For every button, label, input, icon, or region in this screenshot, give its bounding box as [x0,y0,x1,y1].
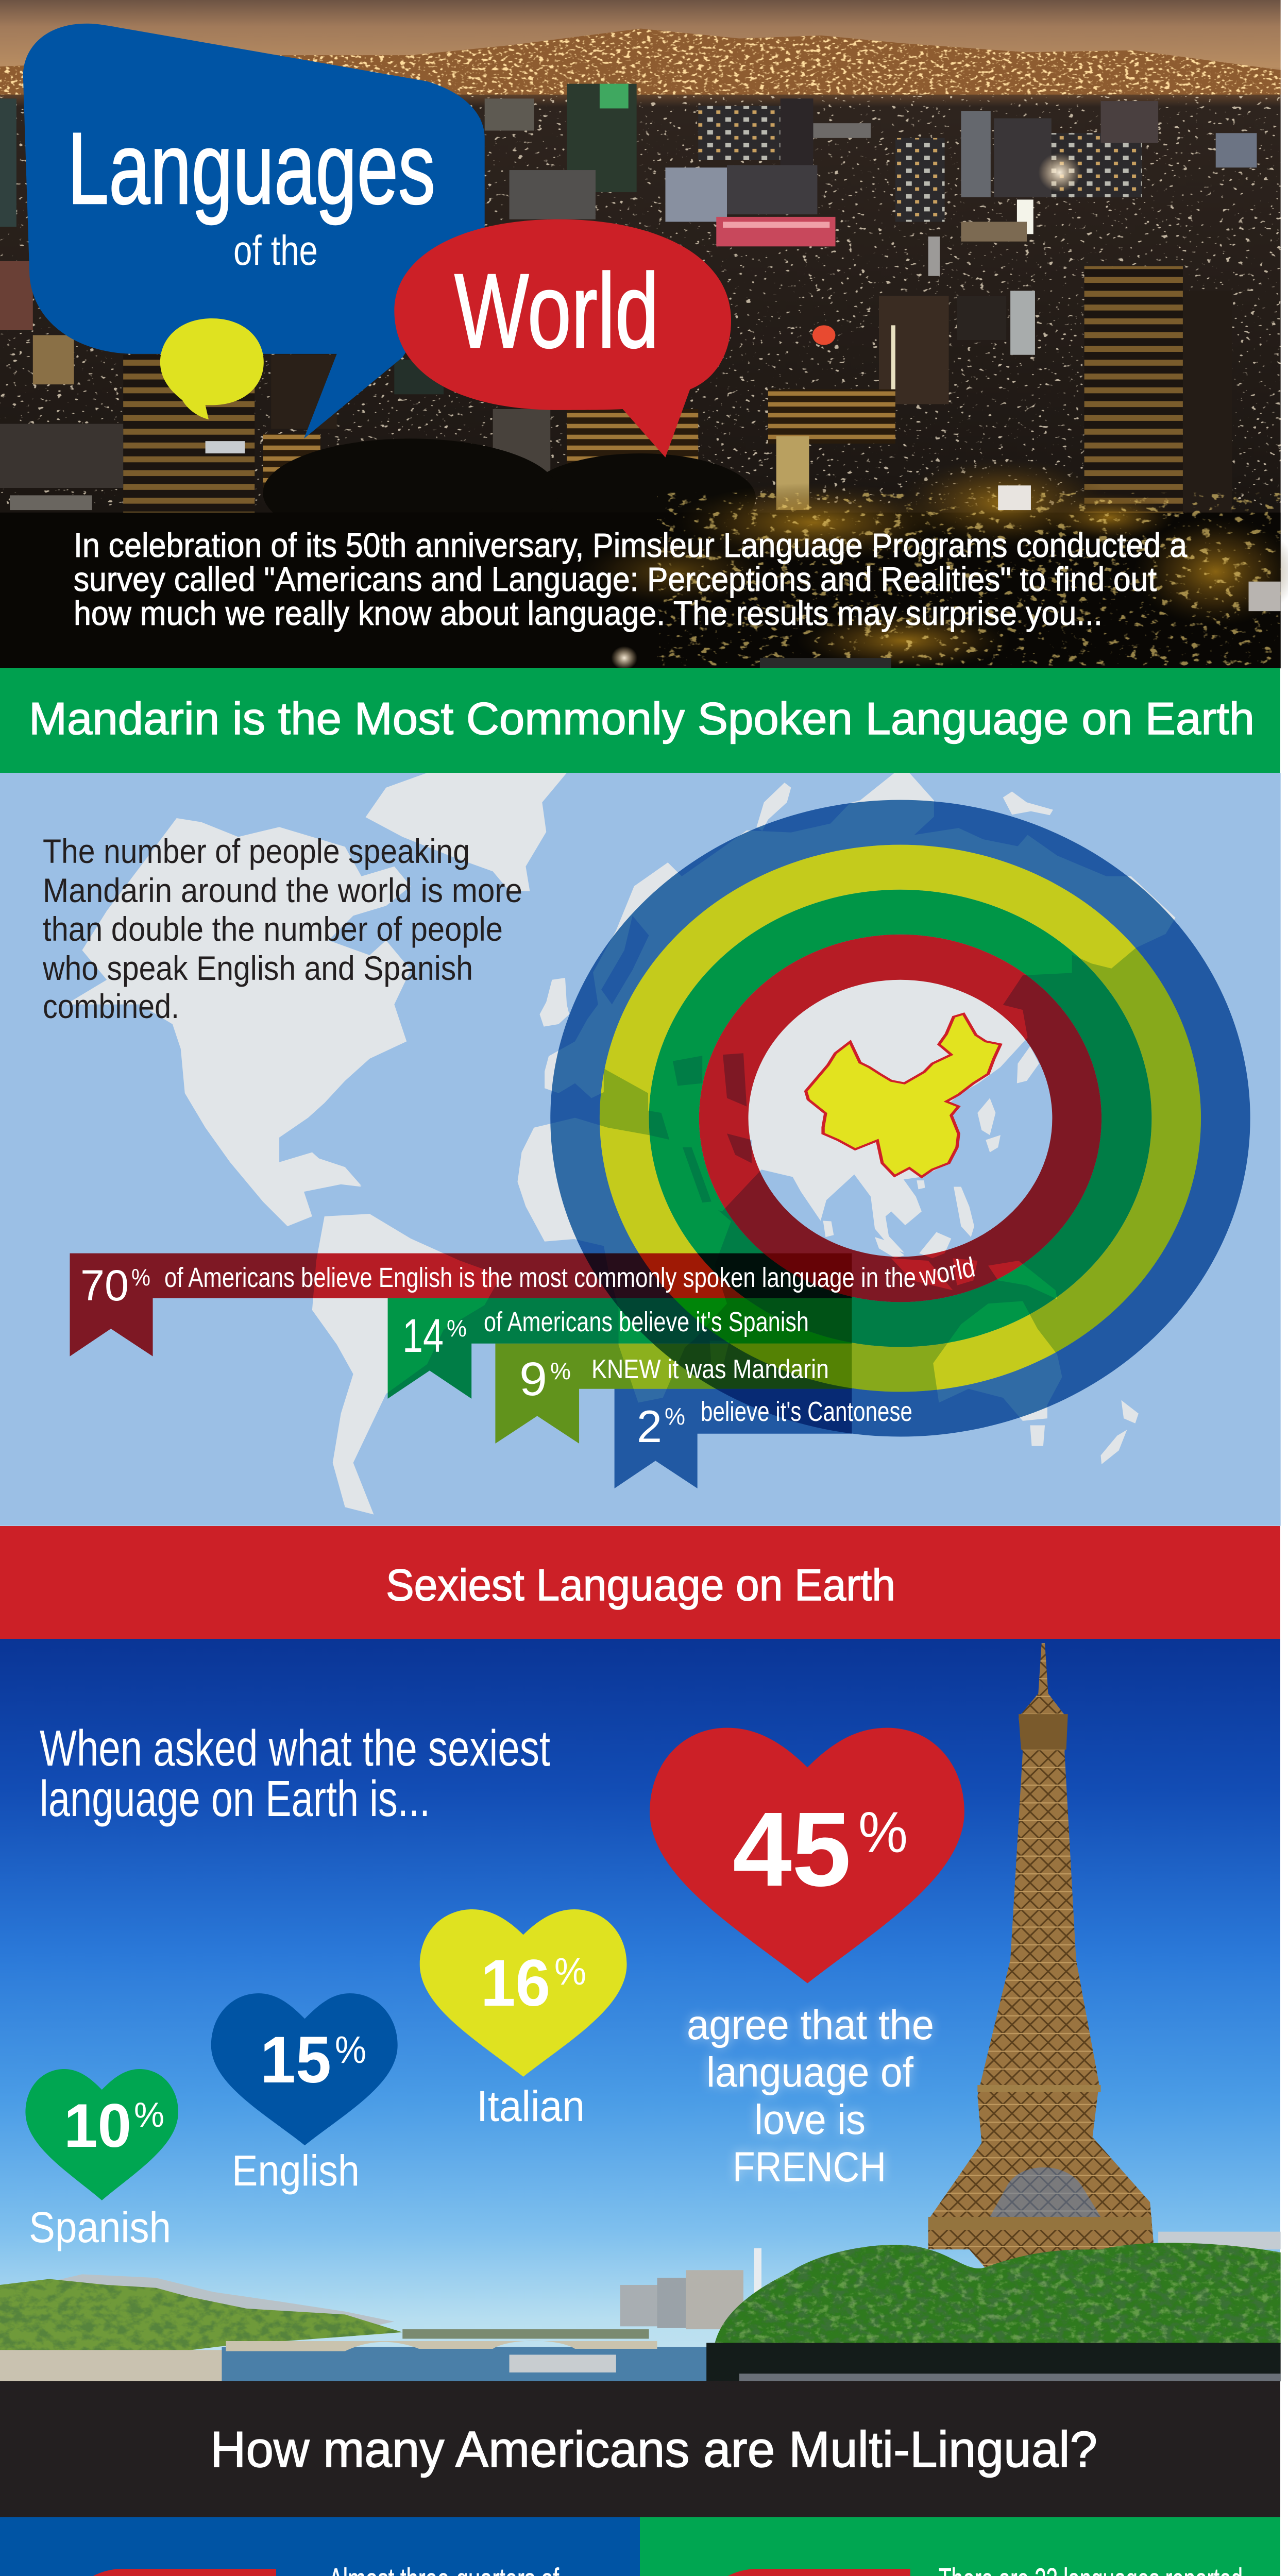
heart: English 15 percent [211,1993,398,2195]
ribbon label: 9 percent: KNEW it was Mandarin [591,1354,829,1384]
intro text [74,526,1187,632]
map body text: combined. [43,987,179,1025]
heart: French 45 percent: % [858,1800,908,1865]
map body text: The number of people speaking [43,832,470,870]
inland seas [601,916,752,1202]
intro text: how much we really know about language. The results may surprise you... [74,594,1103,632]
section: Paris photo [0,1639,1281,2381]
heart: Spanish 10 percent: 10 [64,2091,131,2160]
ribbon: 9 percent [495,1344,852,1444]
heart: English 15 percent: 15 [260,2023,331,2097]
ribbon label: 70 percent: 70 [80,1261,129,1310]
ribbon label: 70 percent [80,1251,977,1310]
ribbon label: 9 percent [519,1353,829,1405]
section banner: Mandarin: Mandarin is the Most Commonly Spoken Language on Earth [29,693,1255,744]
panel: world map with language rings [0,773,1281,1526]
title: Languages [67,111,435,225]
intro text: In celebration of its 50th anniversary, Pimsleur Language Programs conducted a [74,526,1187,564]
ring: yellow [600,845,1201,1392]
text: French callout: agree that the [687,2002,934,2048]
ribbon label: 70 percent: of Americans believe English is the most commonly spoken language in the [164,1262,916,1293]
speech bubble: yellow [160,318,264,419]
heart: Italian 16 percent: % [554,1950,586,1993]
heart: Italian 16 percent: 16 [481,1946,550,2020]
section banner: Multi-Lingual [0,2381,1280,2517]
section banner: Multi-Lingual: How many Americans are Multi-Lingual? [210,2421,1097,2478]
text: sexiest question: language on Earth is... [40,1770,430,1827]
ribbon: 70 percent [70,1253,852,1357]
section banner: Sexiest Language [0,1526,1280,1639]
text: sexiest question: When asked what the sexiest [40,1720,550,1776]
ribbon label: 9 percent: % [550,1358,571,1384]
ribbon label: 14 percent: 14 [402,1310,444,1362]
title [67,111,659,370]
map body text [42,832,522,1025]
map body text: than double the number of people [43,910,503,948]
ring: green [649,890,1151,1347]
heart: Spanish 10 percent [25,2069,178,2251]
heart: Italian 16 percent: Italian [477,2082,585,2130]
speech bubble: red [394,219,731,457]
ribbon label: 2 percent [637,1396,912,1452]
heart: Spanish 10 percent: % [134,2095,164,2134]
callout: 27 percent say yes [687,2569,910,2576]
heart: English 15 percent: % [335,2028,366,2071]
ribbon label: 9 percent: 9 [519,1353,547,1405]
map of China [806,1014,1001,1177]
text: French callout: love is [754,2096,866,2143]
intro text: survey called "Americans and Language: Perceptions and Realities" to find out [74,560,1157,598]
heart: Spanish 10 percent: Spanish [29,2203,171,2251]
callout: 73 percent say no [53,2569,276,2576]
text: French callout [687,2002,934,2191]
ribbon label: 14 percent [402,1307,809,1362]
map body text: who speak English and Spanish [42,949,473,987]
heart: English 15 percent: English [232,2146,360,2195]
text: French callout: language of [706,2049,913,2096]
heart: French 45 percent: 45 [733,1790,851,1908]
ring: red [699,935,1101,1302]
ribbon: 14 percent [388,1298,852,1399]
title: World [454,252,659,370]
heart: Italian 16 percent [420,1909,627,2130]
panel: say yes [640,2517,1280,2576]
section banner: Mandarin [0,668,1280,773]
ribbon label: 70 percent: world [917,1251,977,1293]
title: of the [233,227,318,274]
heart: French 45 percent [650,1728,964,1984]
section banner: Sexiest Language: Sexiest Language on Earth [386,1561,895,1610]
icon: Eiffel tower [928,1643,1154,2273]
panel: say no [0,2517,640,2576]
map body text: Mandarin around the world is more [43,871,522,909]
ribbon label: 14 percent: of Americans believe it's Spanish [484,1307,809,1337]
section: header city photo [0,0,1288,670]
ribbon: 2 percent [615,1389,852,1488]
text: sexiest question [40,1720,550,1827]
ribbon label: 70 percent: % [131,1264,150,1291]
speech bubble: blue [23,24,485,438]
ribbon label: 2 percent: % [665,1403,685,1430]
world map landmasses [66,773,1176,1515]
ribbon label: 2 percent: believe it's Cantonese [701,1396,912,1427]
ribbon label: 2 percent: 2 [637,1401,662,1452]
ribbon label: 14 percent: % [447,1315,467,1342]
ring: blue [550,800,1250,1437]
text: French callout: FRENCH [733,2144,886,2191]
